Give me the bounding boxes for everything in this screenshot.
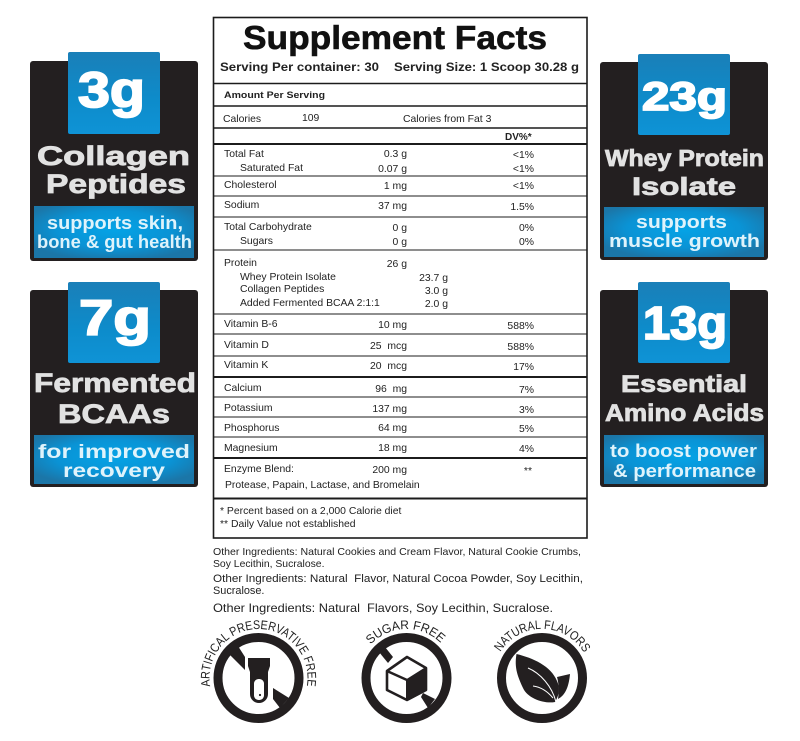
other ingredients: Other Ingredients: Natural Flavors, Soy Lecithin, Sucralose. bbox=[213, 601, 553, 615]
other ingredients: Soy Lecithin, Sucralose. bbox=[213, 559, 324, 570]
cholesterol: 1 mg bbox=[384, 181, 407, 192]
heading: fermented bcaas: Fermented bbox=[34, 368, 196, 398]
carbohydrates: 0% bbox=[519, 237, 534, 248]
protein: 2.0 g bbox=[425, 299, 448, 310]
blue tab: 13g bbox=[638, 282, 730, 363]
enzyme blend: ** bbox=[524, 466, 532, 477]
enzyme blend: Enzyme Blend: bbox=[224, 464, 294, 475]
other ingredients bbox=[213, 547, 583, 615]
cholesterol bbox=[224, 180, 534, 192]
card: fermented bcaas bbox=[30, 282, 198, 487]
protein: Whey Protein Isolate bbox=[240, 272, 336, 283]
enzyme blend bbox=[224, 464, 532, 491]
benefit bar: muscle growth bbox=[609, 231, 760, 251]
vitamins: 10 mg bbox=[378, 320, 407, 331]
vitamins: Vitamin K bbox=[224, 360, 268, 371]
card: whey protein isolate bbox=[600, 54, 768, 260]
protein: 26 g bbox=[387, 259, 407, 270]
minerals: 5% bbox=[519, 424, 534, 435]
fats: Saturated Fat bbox=[240, 163, 303, 174]
enzyme blend: Protease, Papain, Lactase, and Bromelain bbox=[225, 480, 420, 491]
icon: artificial preservative free bbox=[200, 620, 316, 723]
sodium bbox=[224, 200, 534, 213]
minerals: 96 mg bbox=[375, 384, 407, 395]
minerals: 4% bbox=[519, 444, 534, 455]
fats: 0.07 g bbox=[378, 164, 407, 175]
heading: essential amino acids: Essential bbox=[621, 371, 747, 398]
amount per serving: Amount Per Serving bbox=[224, 90, 325, 101]
blue tab: 7g bbox=[68, 282, 160, 363]
minerals: Magnesium bbox=[224, 443, 278, 454]
cholesterol: Cholesterol bbox=[224, 180, 277, 191]
carbohydrates: 0 g bbox=[393, 223, 407, 234]
vitamins: Vitamin D bbox=[224, 340, 269, 351]
protein: Collagen Peptides bbox=[240, 284, 324, 295]
minerals: 3% bbox=[519, 405, 534, 416]
minerals: Phosphorus bbox=[224, 423, 279, 434]
icon: natural flavors bbox=[494, 620, 590, 723]
benefit bar: recovery bbox=[63, 461, 166, 482]
benefit bar: to boost power bbox=[610, 441, 757, 461]
footnotes: * Percent based on a 2,000 Calorie diet bbox=[220, 506, 401, 517]
footnotes: ** Daily Value not established bbox=[220, 519, 356, 530]
vitamins: 17% bbox=[513, 362, 534, 373]
card: essential amino acids bbox=[600, 282, 768, 487]
fats: <1% bbox=[513, 164, 534, 175]
sodium: 1.5% bbox=[510, 202, 534, 213]
minerals: 64 mg bbox=[378, 423, 407, 434]
carbohydrates: 0% bbox=[519, 223, 534, 234]
vitamins bbox=[224, 319, 534, 373]
minerals: Potassium bbox=[224, 403, 273, 414]
heading: whey protein isolate: Isolate bbox=[632, 173, 736, 201]
fats bbox=[224, 149, 534, 175]
carbohydrates: Sugars bbox=[240, 236, 273, 247]
dv header: DV%* bbox=[505, 132, 532, 143]
title: Supplement Facts bbox=[243, 19, 547, 56]
sodium: 37 mg bbox=[378, 201, 407, 212]
card: collagen peptides bbox=[30, 52, 198, 261]
icon: natural flavors: NATURAL FLAVORS bbox=[494, 620, 590, 652]
protein: Added Fermented BCAA 2:1:1 bbox=[240, 298, 380, 309]
benefit bar: supports skin, bbox=[47, 213, 183, 233]
vitamins: Vitamin B-6 bbox=[224, 319, 278, 330]
heading: whey protein isolate: Whey Protein bbox=[605, 145, 764, 171]
calories row bbox=[223, 113, 492, 125]
benefit bar: supports bbox=[636, 212, 727, 232]
blue tab: 23g bbox=[638, 54, 730, 135]
benefit bar: bone & gut health bbox=[37, 232, 192, 252]
benefit bar bbox=[604, 207, 764, 257]
blue tab: 3g: 3g bbox=[78, 62, 145, 118]
protein: Protein bbox=[224, 258, 257, 269]
vitamins: 25 mcg bbox=[370, 341, 407, 352]
benefit bar bbox=[604, 435, 764, 484]
icon: sugar free: SUGAR FREE bbox=[366, 620, 446, 644]
cholesterol: <1% bbox=[513, 181, 534, 192]
other ingredients: Other Ingredients: Natural Cookies and Cream Flavor, Natural Cookie Crumbs, bbox=[213, 547, 581, 558]
heading: essential amino acids bbox=[605, 371, 764, 427]
enzyme blend: 200 mg bbox=[372, 465, 407, 476]
protein: 3.0 g bbox=[425, 286, 448, 297]
minerals: Calcium bbox=[224, 383, 262, 394]
carbohydrates: 0 g bbox=[393, 237, 407, 248]
minerals bbox=[224, 383, 534, 455]
icon: artificial preservative free: ARTIFICAL PRESERVATIVE FREE bbox=[200, 620, 316, 686]
vitamins: 20 mcg bbox=[370, 361, 407, 372]
carbohydrates: Total Carbohydrate bbox=[224, 222, 312, 233]
calories row: Calories bbox=[223, 114, 261, 125]
serving information: Serving Per container: 30 bbox=[220, 60, 379, 74]
fats: 0.3 g bbox=[384, 149, 407, 160]
heading: fermented bcaas bbox=[34, 368, 196, 429]
minerals: 137 mg bbox=[372, 404, 407, 415]
heading: collagen peptides bbox=[37, 141, 190, 199]
footnotes bbox=[220, 506, 401, 530]
protein: 23.7 g bbox=[419, 273, 448, 284]
vitamins: 588% bbox=[507, 321, 534, 332]
minerals: 7% bbox=[519, 385, 534, 396]
sodium: Sodium bbox=[224, 200, 259, 211]
benefit bar bbox=[34, 206, 194, 258]
blue tab: 7g: 7g bbox=[79, 290, 151, 346]
supplement facts panel bbox=[213, 18, 587, 538]
heading: whey protein isolate bbox=[605, 145, 764, 201]
benefit bar bbox=[34, 435, 194, 484]
blue tab: 23g: 23g bbox=[642, 75, 727, 119]
carbohydrates bbox=[224, 222, 534, 248]
heading: essential amino acids: Amino Acids bbox=[605, 400, 764, 427]
blue tab: 13g: 13g bbox=[643, 297, 727, 349]
protein bbox=[224, 258, 448, 310]
benefit bar: for improved bbox=[38, 442, 190, 463]
heading: fermented bcaas: BCAAs bbox=[58, 399, 170, 429]
other ingredients: Other Ingredients: Natural Flavor, Natural Cocoa Powder, Soy Lecithin, bbox=[213, 573, 583, 585]
fats: Total Fat bbox=[224, 149, 264, 160]
blue tab: 3g bbox=[68, 52, 160, 134]
minerals: 18 mg bbox=[378, 443, 407, 454]
serving information: Serving Size: 1 Scoop 30.28 g bbox=[394, 60, 579, 74]
heading: collagen peptides: Peptides bbox=[46, 169, 186, 199]
calories row: 109 bbox=[302, 113, 320, 124]
other ingredients: Sucralose. bbox=[213, 585, 264, 597]
heading: collagen peptides: Collagen bbox=[37, 141, 190, 171]
calories row: Calories from Fat 3 bbox=[403, 114, 492, 125]
vitamins: 588% bbox=[507, 342, 534, 353]
benefit bar: & performance bbox=[613, 461, 756, 481]
fats: <1% bbox=[513, 150, 534, 161]
icon: sugar free bbox=[362, 620, 452, 723]
serving information bbox=[220, 60, 579, 74]
